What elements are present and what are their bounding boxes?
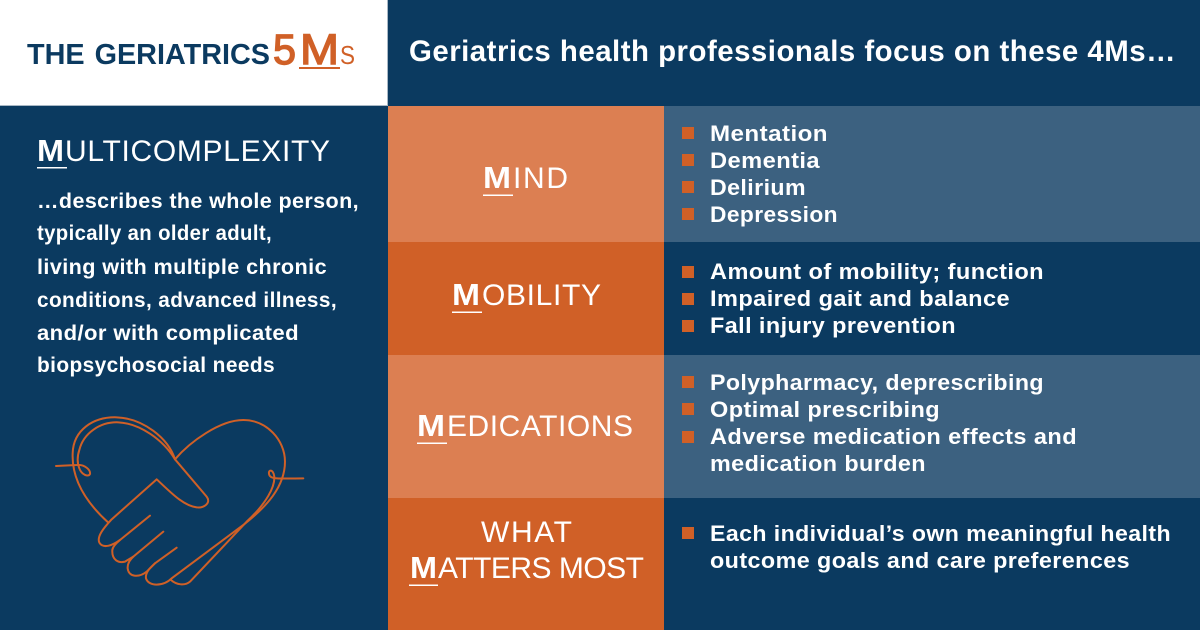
label: mind (483, 160, 568, 196)
icon: heart handshake (56, 417, 303, 585)
label: mobility: OBILITY (482, 279, 601, 312)
description text: …describes the whole person, (37, 189, 359, 213)
list: mind: Delirium (710, 175, 806, 200)
logo mark: 5Ms: 5 (273, 26, 296, 74)
description text: and/or with complicated (37, 321, 299, 345)
list: medications: Polypharmacy, deprescribing (710, 370, 1044, 395)
list: mobility: Impaired gait and balance (710, 286, 1010, 311)
list: mind: Mentation (710, 121, 828, 146)
list: mobility: Fall injury prevention (710, 313, 956, 338)
label: mind: IND (513, 162, 568, 195)
list: what matters most (682, 521, 1171, 573)
panel: mobility (388, 242, 1200, 355)
list: mind (682, 121, 838, 227)
label: what matters most: ATTERS MOST (438, 552, 644, 585)
panel: what matters most (388, 498, 1200, 630)
list: medications: Adverse medication effects and (710, 424, 1077, 449)
logo title: The Geriatrics: THE GERIATRICS (27, 39, 270, 71)
description text: living with multiple chronic (37, 255, 327, 279)
list: medications (682, 370, 1077, 476)
list: medications: medication burden (710, 451, 926, 476)
label: mind: M (483, 160, 511, 195)
label: medications: EDICATIONS (447, 410, 633, 443)
panel: medications (388, 355, 1200, 498)
logo panel (0, 0, 388, 106)
panel: mind (388, 106, 1200, 242)
description text: biopsychosocial needs (37, 353, 275, 377)
logo mark: 5Ms: M (300, 26, 339, 74)
logo mark: 5Ms: S (340, 40, 355, 70)
list: mobility: Amount of mobility; function (710, 259, 1044, 284)
panel: multicomplexity (37, 133, 359, 377)
label: mobility: M (452, 277, 480, 312)
label: medications: M (417, 408, 445, 443)
description text: conditions, advanced illness, (37, 288, 337, 312)
list: mind: Depression (710, 202, 838, 227)
list: mind: Dementia (710, 148, 820, 173)
description text (37, 189, 359, 377)
logo mark: 5Ms (273, 26, 355, 74)
heading: multicomplexity: M (37, 133, 64, 168)
label: what matters most (409, 516, 644, 586)
heading: multicomplexity: ULTICOMPLEXITY (65, 135, 330, 168)
label: what matters most: M (410, 550, 437, 585)
list: what matters most: outcome goals and care preferences (710, 548, 1130, 573)
list: what matters most: Each individual’s own meaningful health (710, 521, 1171, 546)
list: mobility (682, 259, 1044, 338)
description text: typically an older adult, (37, 221, 272, 245)
header statement: Geriatrics health professionals focus on these 4Ms… (409, 35, 1176, 68)
label: what matters most: WHAT (481, 516, 572, 549)
list: medications: Optimal prescribing (710, 397, 940, 422)
